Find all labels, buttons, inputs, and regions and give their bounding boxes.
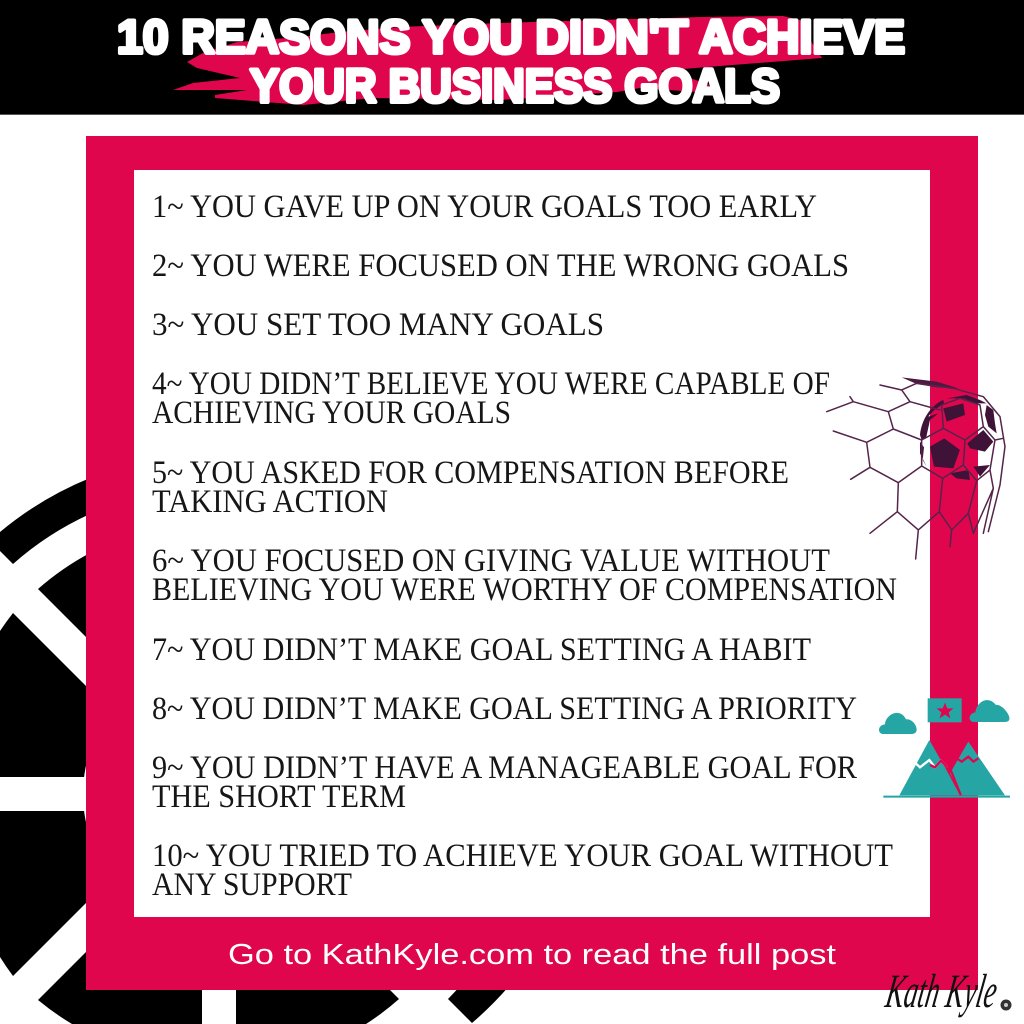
list of ten reasons: ANY SUPPORT: [152, 867, 352, 903]
list of ten reasons: ACHIEVING YOUR GOALS: [152, 395, 511, 431]
header band: [0, 0, 1024, 115]
list of ten reasons: 7~ YOU DIDN’T MAKE GOAL SETTING A HABIT: [152, 632, 811, 668]
title: YOUR BUSINESS GOALS: [250, 59, 780, 112]
list of ten reasons: 8~ YOU DIDN’T MAKE GOAL SETTING A PRIORITY: [152, 691, 857, 727]
list of ten reasons: 1~ YOU GAVE UP ON YOUR GOALS TOO EARLY: [152, 189, 817, 225]
list of ten reasons: 4~ YOU DIDN’T BELIEVE YOU WERE CAPABLE OF: [152, 366, 830, 402]
list of ten reasons: [152, 189, 897, 903]
list of ten reasons: TAKING ACTION: [152, 484, 388, 520]
list of ten reasons: 9~ YOU DIDN’T HAVE A MANAGEABLE GOAL FOR: [152, 750, 857, 786]
list of ten reasons: 10~ YOU TRIED TO ACHIEVE YOUR GOAL WITHOUT: [152, 838, 893, 874]
list of ten reasons: 6~ YOU FOCUSED ON GIVING VALUE WITHOUT: [152, 543, 830, 579]
title: [117, 10, 905, 112]
list of ten reasons: THE SHORT TERM: [152, 779, 406, 815]
icon: mountains with flag and clouds: [879, 698, 1010, 797]
list of ten reasons: 3~ YOU SET TOO MANY GOALS: [152, 307, 604, 343]
list of ten reasons: BELIEVING YOU WERE WORTHY OF COMPENSATION: [152, 572, 897, 608]
red brush stroke: [173, 16, 822, 105]
title: 10 REASONS YOU DIDN'T ACHIEVE: [117, 10, 905, 63]
call to action footer: Go to KathKyle.com to read the full post: [228, 939, 836, 971]
list of ten reasons: 2~ YOU WERE FOCUSED ON THE WRONG GOALS: [152, 248, 849, 284]
icon: soccer ball in net: [827, 377, 1005, 559]
white list panel: [134, 170, 930, 917]
red frame panel: [86, 136, 978, 990]
background basketball graphic: [0, 478, 510, 1024]
list of ten reasons: 5~ YOU ASKED FOR COMPENSATION BEFORE: [152, 455, 789, 491]
